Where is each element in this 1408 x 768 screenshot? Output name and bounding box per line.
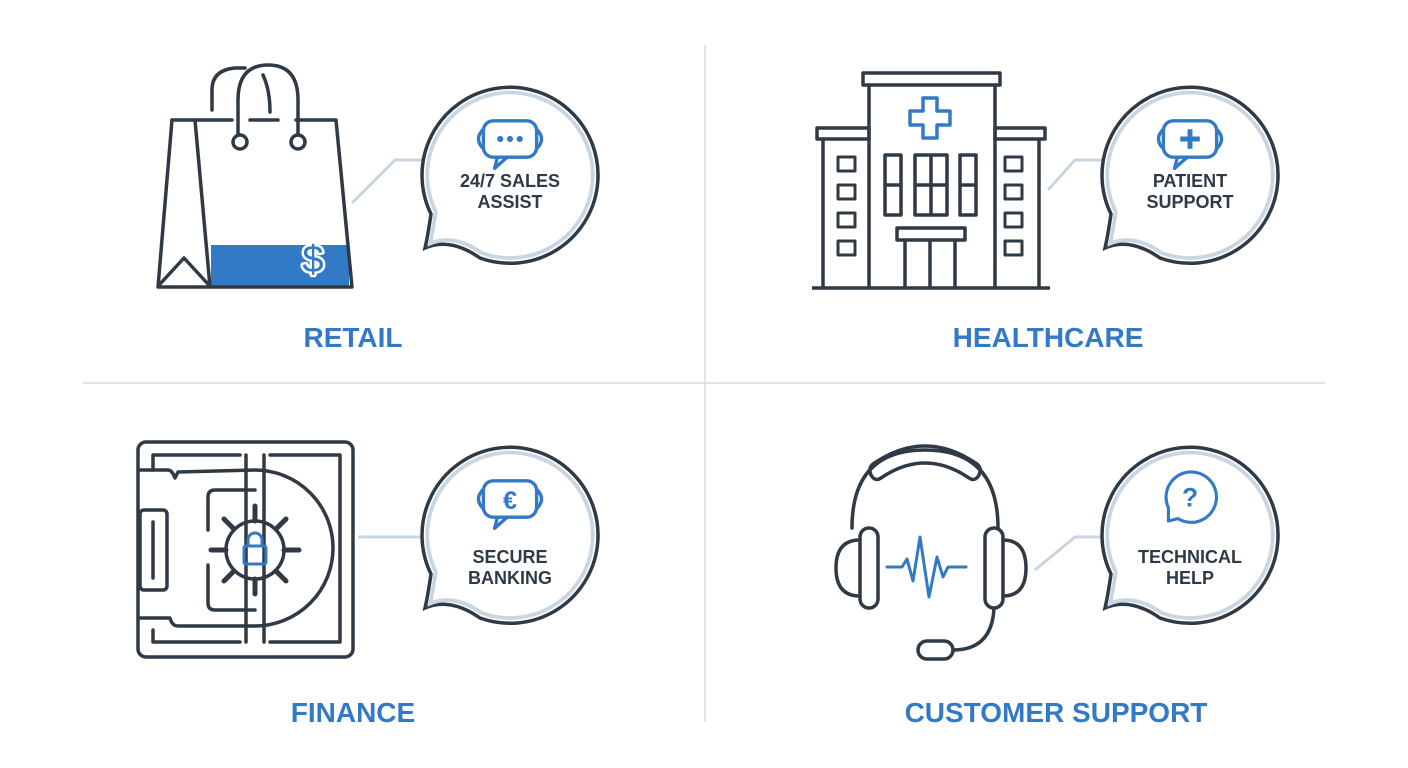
icon: hospital [812, 73, 1050, 288]
heading: finance: FINANCE [291, 697, 415, 728]
heading: customer support: CUSTOMER SUPPORT [905, 697, 1207, 728]
callout: technical help: ? [1182, 483, 1198, 513]
callout: 24/7 sales assist: 24/7 SALES [460, 171, 560, 191]
callout: technical help [1102, 447, 1278, 623]
panel: finance [138, 442, 598, 728]
icon: shopping bag: $ [302, 239, 324, 281]
icon: vault [138, 442, 353, 657]
callout: secure banking: SECURE [472, 547, 548, 567]
callout: technical help: TECHNICAL [1138, 547, 1242, 567]
callout: 24/7 sales assist: ASSIST [477, 192, 543, 212]
connector [1035, 537, 1105, 570]
callout: secure banking: € [503, 487, 517, 515]
callout: patient support: PATIENT [1153, 171, 1227, 191]
heading: healthcare: HEALTHCARE [953, 322, 1143, 353]
panel: retail [158, 65, 598, 353]
icon: headset [836, 446, 1026, 659]
heading: retail: RETAIL [303, 322, 403, 353]
connector [358, 536, 422, 538]
panel: healthcare [812, 73, 1278, 353]
connector [1048, 160, 1105, 190]
callout: patient support: SUPPORT [1146, 192, 1234, 212]
callout: secure banking: BANKING [468, 568, 552, 588]
callout: patient support [1102, 87, 1278, 263]
callout: secure banking [422, 447, 598, 623]
callout: technical help: HELP [1166, 568, 1214, 588]
callout: 24/7 sales assist [422, 87, 598, 263]
connector [352, 160, 425, 203]
icon: shopping bag [158, 65, 352, 287]
panel: customer support [836, 446, 1278, 728]
